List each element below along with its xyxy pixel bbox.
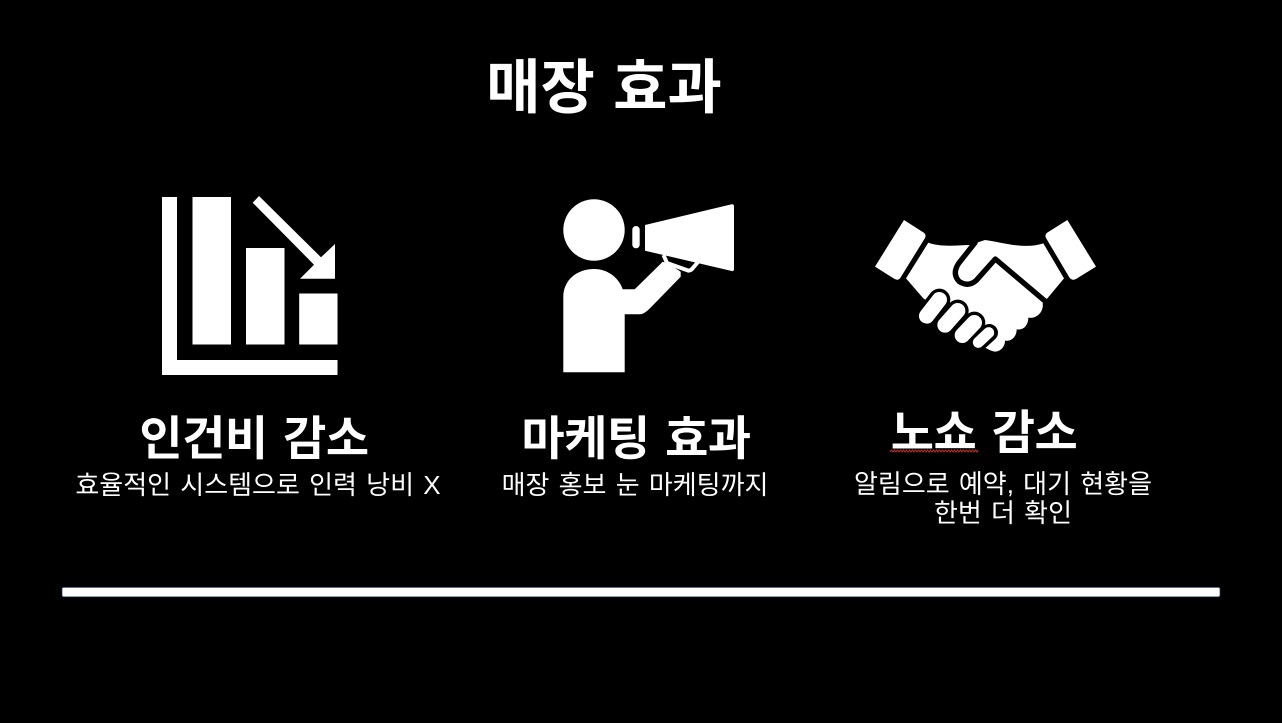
text: 노쇼 감소 description: 한번 더 확인 [934, 498, 1072, 528]
title: 매장 효과 [486, 55, 722, 121]
heading: 인건비 감소: 인건비 감소 [139, 412, 369, 465]
text: 노쇼 감소 description [854, 469, 1152, 528]
text: 인건비 감소 description: 효율적인 시스템으로 인력 낭비 X [75, 470, 441, 500]
heading: 마케팅 효과: 마케팅 효과 [521, 412, 751, 465]
text: 노쇼 감소 description: 알림으로 예약, 대기 현황을 [854, 469, 1152, 499]
spell-check underline [890, 449, 978, 453]
text: 마케팅 효과 description: 매장 홍보 눈 마케팅까지 [502, 470, 768, 500]
heading: 노쇼 감소: 노쇼 감소 [891, 406, 1077, 459]
